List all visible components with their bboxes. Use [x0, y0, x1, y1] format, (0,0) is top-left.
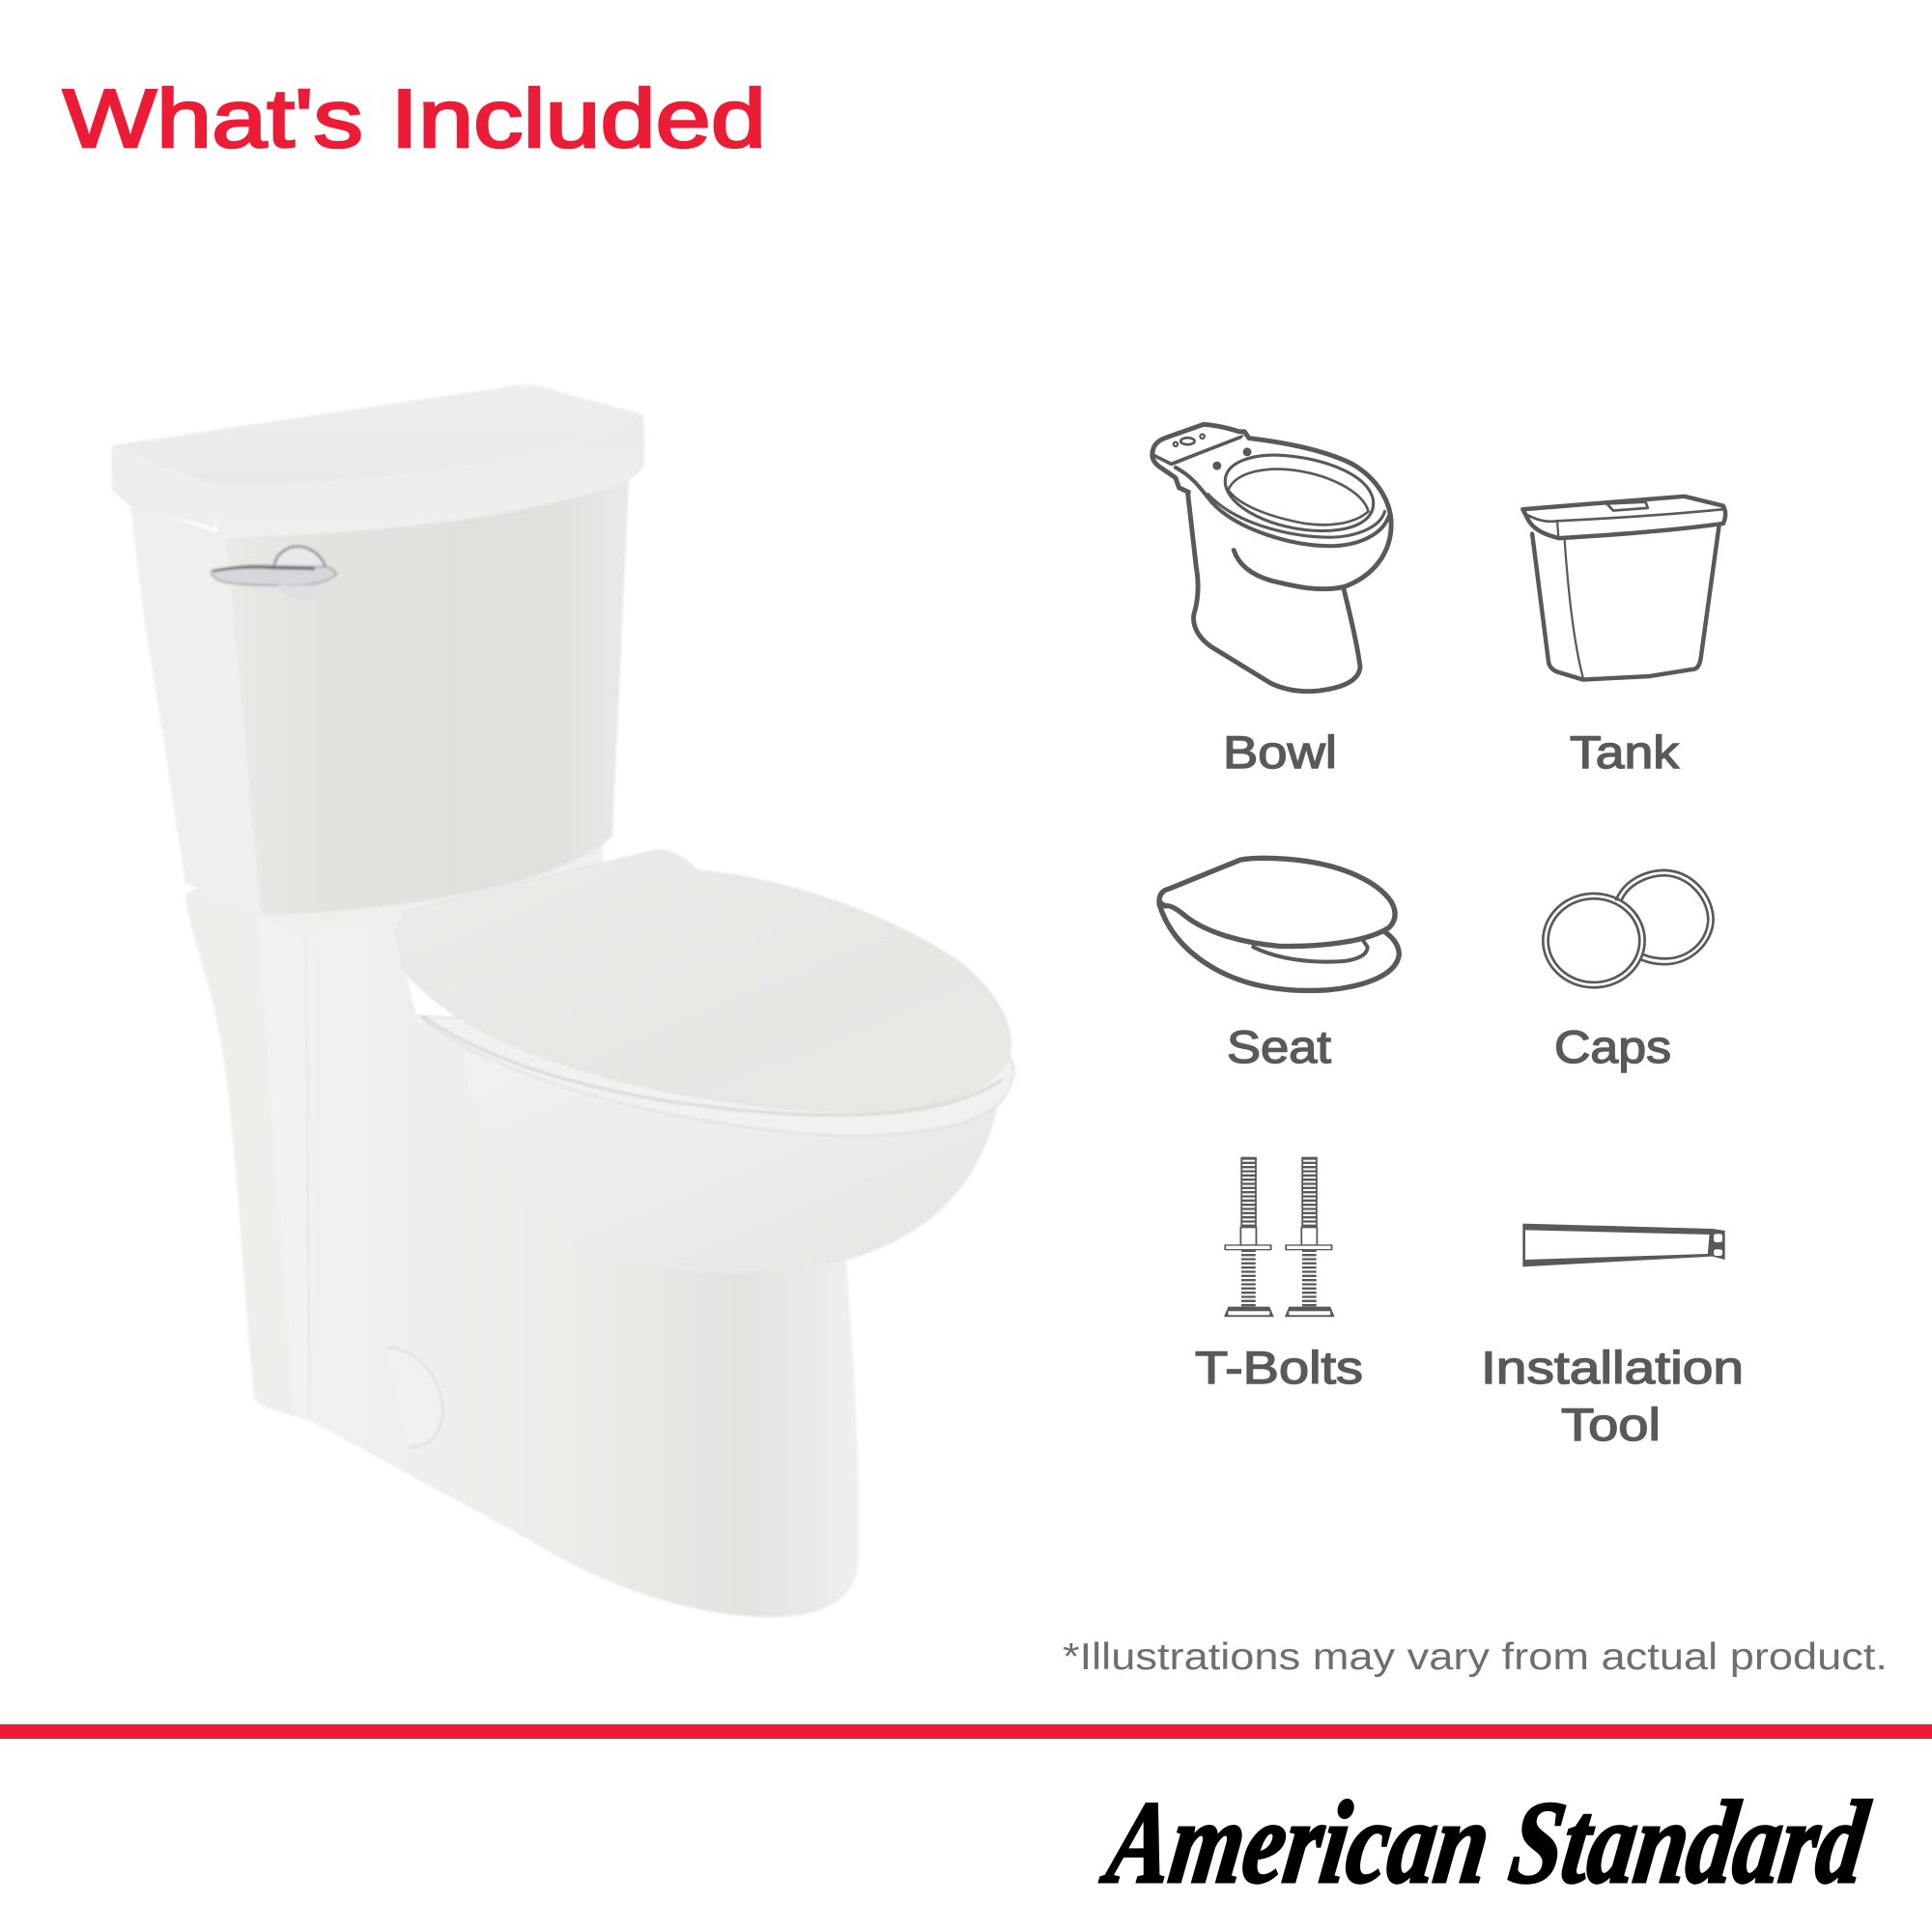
- pedestal: [307, 922, 859, 1617]
- icon: installation tool: [1522, 1224, 1725, 1266]
- lever lower plate: [278, 585, 322, 600]
- flush lever: [212, 547, 337, 600]
- toilet tank: [111, 384, 644, 915]
- drain cap: [387, 1348, 442, 1448]
- icon: t-bolts: [1224, 1157, 1335, 1317]
- label: Tank: Tank: [1570, 726, 1680, 778]
- bowl rim: [418, 1016, 1013, 1136]
- right bolt: [1285, 1157, 1335, 1317]
- product photo: toilet: [111, 384, 1013, 1617]
- toilet lower section: base, bowl and seat: [185, 821, 1013, 1617]
- neck between tank and base: [185, 821, 604, 940]
- rear column: [185, 895, 340, 1419]
- tank lid top: [111, 384, 643, 486]
- label: Installation Tool: Installation: [1481, 1342, 1744, 1393]
- lever arm: [212, 565, 337, 585]
- icon: bowl: [1152, 424, 1391, 692]
- lever highlight: [213, 567, 315, 571]
- bowl: [462, 1053, 997, 1273]
- icon: seat: [1159, 858, 1399, 990]
- tank lid front: [213, 414, 644, 538]
- label: Seat: Seat: [1227, 1021, 1331, 1072]
- label: Caps: Caps: [1554, 1021, 1671, 1072]
- seat edge shadow: [423, 1017, 1003, 1115]
- tank left side: [129, 504, 261, 914]
- tank front: [226, 480, 629, 915]
- label: T-Bolts: T-Bolts: [1195, 1342, 1363, 1393]
- label: Bowl: Bowl: [1223, 726, 1337, 778]
- tank lid left: [111, 445, 215, 527]
- icon: tank: [1522, 497, 1725, 680]
- label: Installation Tool: [1481, 1342, 1744, 1450]
- lever plate: [274, 547, 326, 569]
- groove line: [306, 936, 310, 1419]
- red divider bar: [0, 1724, 1932, 1739]
- left bolt: [1224, 1157, 1274, 1317]
- icon: caps: [1543, 870, 1714, 987]
- footnote: *Illustrations may vary from actual product.: [1063, 1636, 1888, 1678]
- title: What's Included: [63, 73, 766, 165]
- label: Installation Tool: Tool: [1561, 1399, 1661, 1450]
- seat lid: [396, 850, 1010, 1112]
